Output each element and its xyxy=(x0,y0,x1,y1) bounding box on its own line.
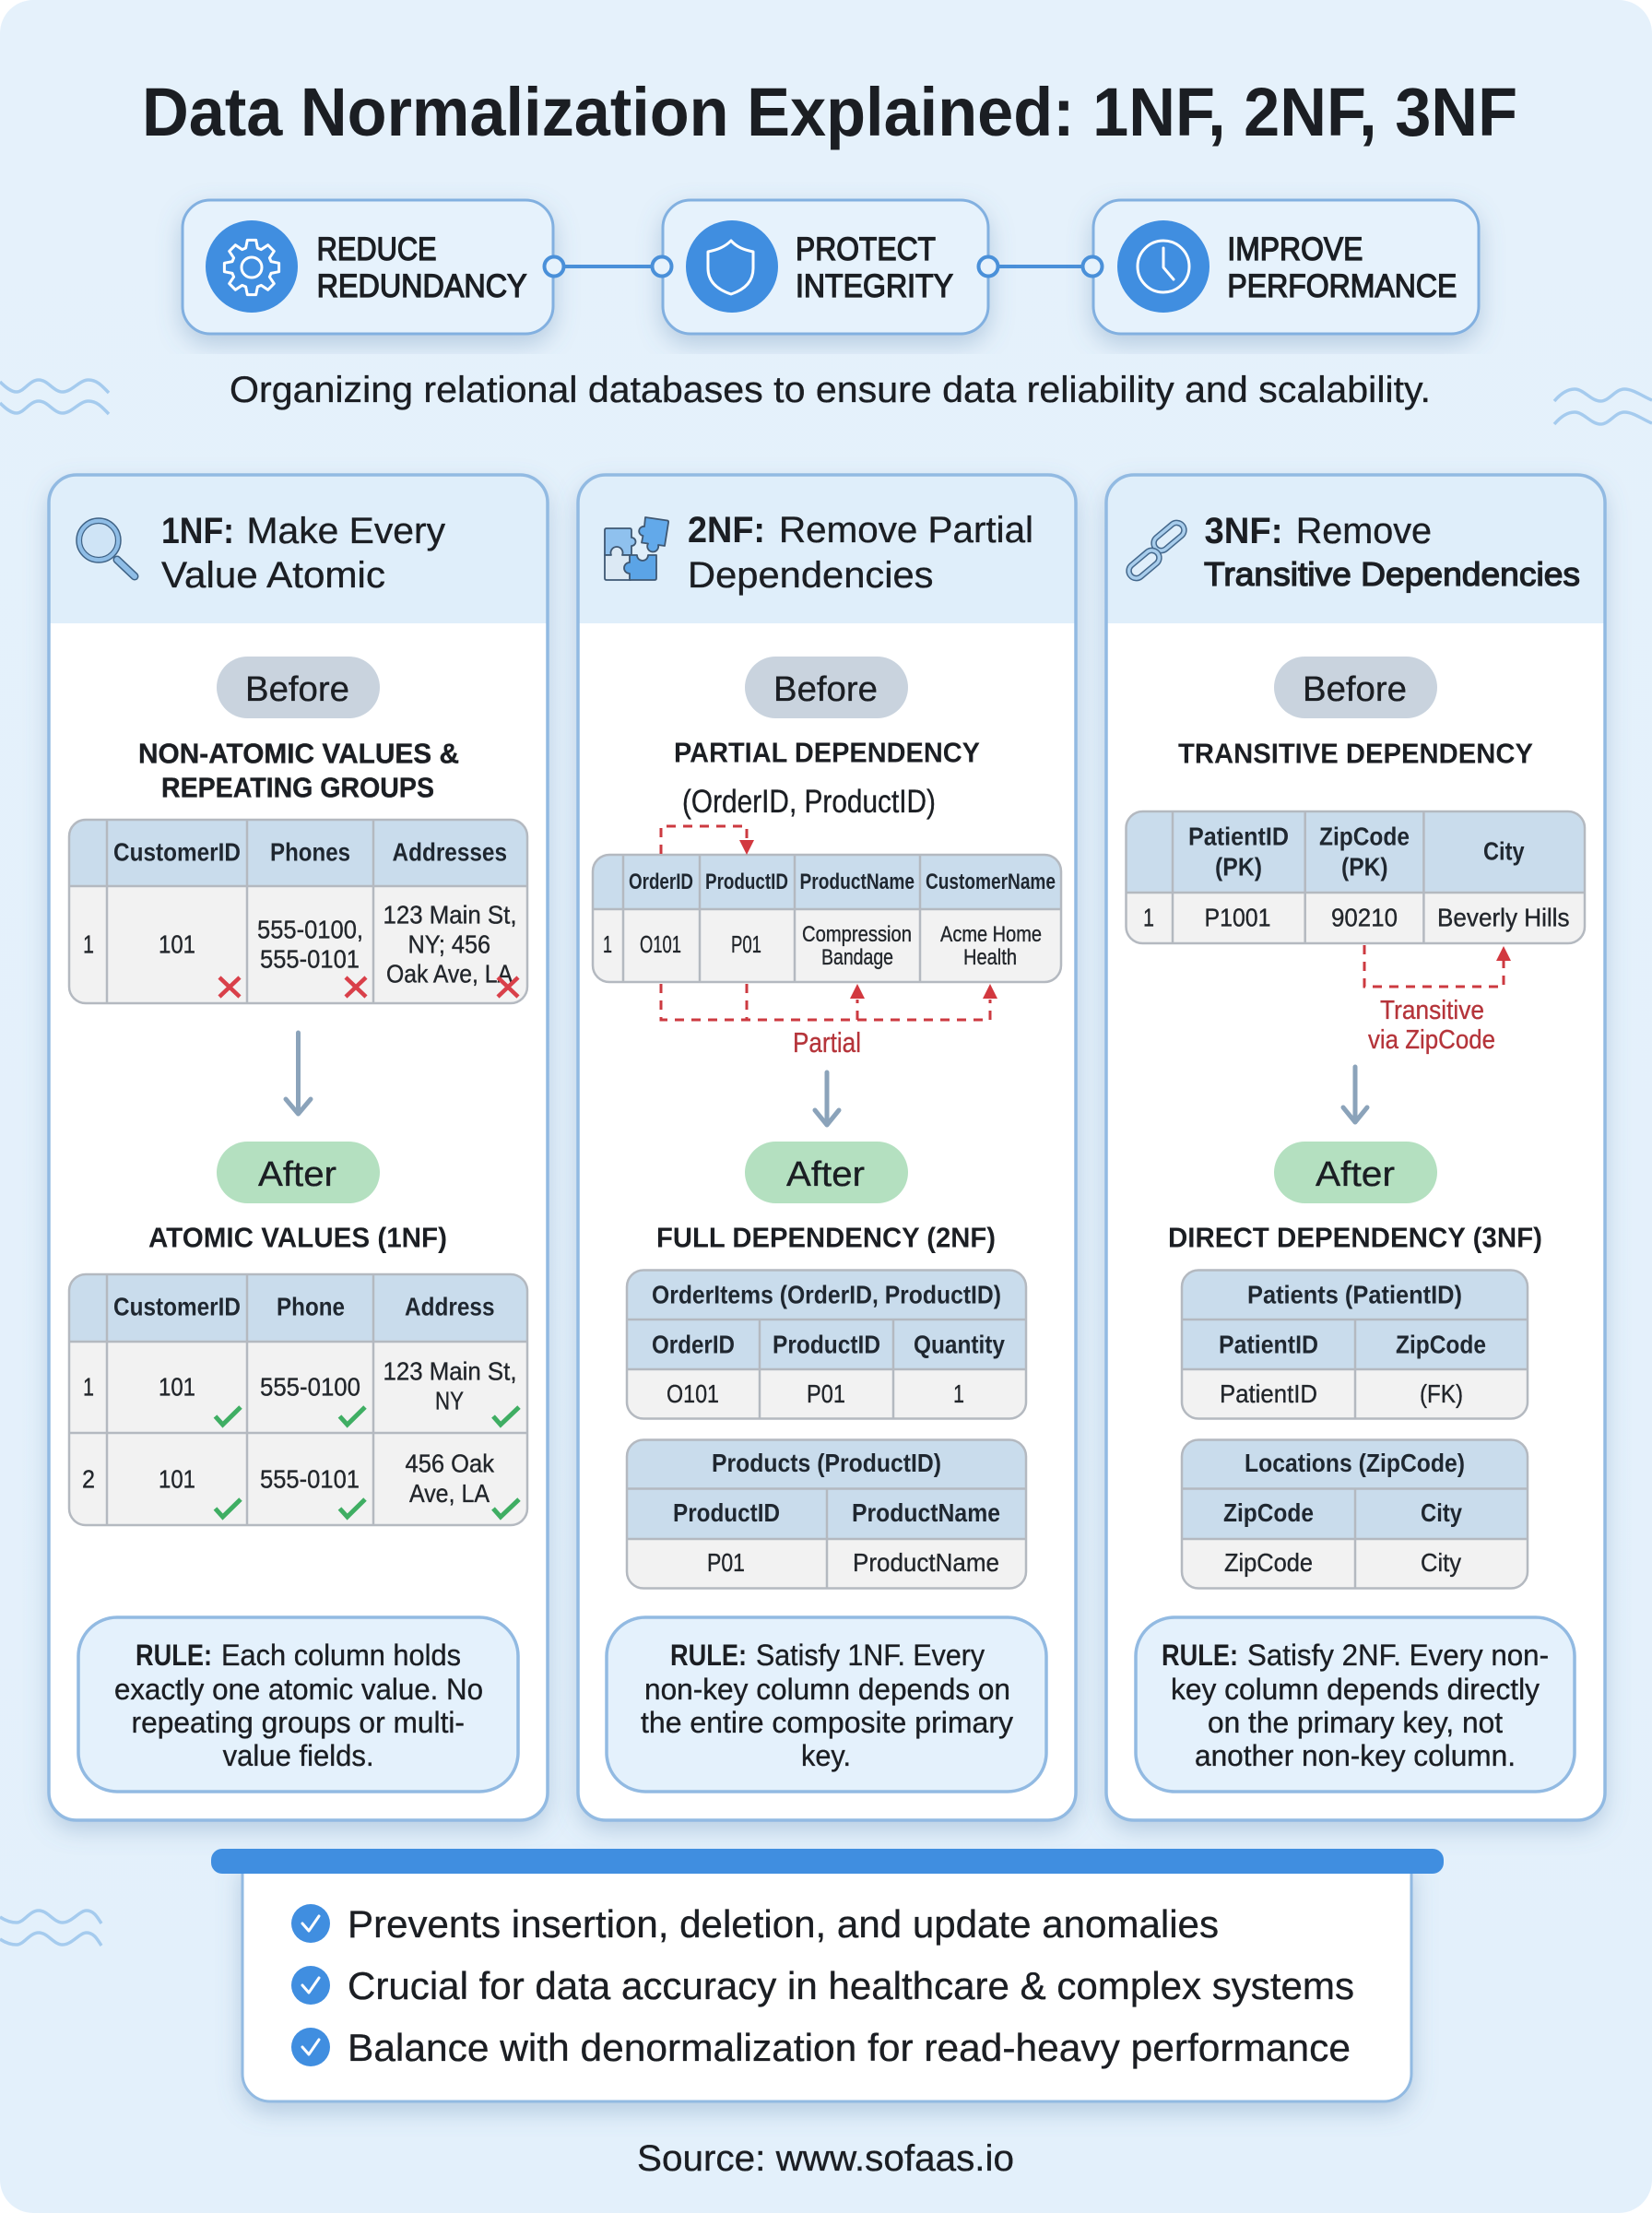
before table: Addresses xyxy=(393,837,507,867)
transitive label: via ZipCode xyxy=(1368,1025,1495,1055)
before table: 555-0100, xyxy=(257,915,363,944)
chip label: REDUNDANCY xyxy=(317,268,527,304)
chip: reduce redundancy xyxy=(183,200,553,334)
rule box: value fields. xyxy=(223,1739,374,1772)
panel heading: 1NF: xyxy=(161,511,234,551)
after pill xyxy=(217,1142,380,1203)
table: Products xyxy=(627,1440,1026,1588)
composite key label: (OrderID, ProductID) xyxy=(682,784,936,820)
table: Locations: Locations (ZipCode) xyxy=(1245,1449,1465,1477)
panel heading xyxy=(1204,511,1580,593)
panel heading: 3NF: xyxy=(1204,511,1283,551)
summary top bar xyxy=(211,1849,1444,1874)
connector lines between benefit chips xyxy=(553,265,1092,268)
bullet 2: Crucial for data accuracy in healthcare & complex systems xyxy=(348,1964,1354,2007)
chip label: REDUCE xyxy=(317,231,437,267)
panel header xyxy=(1106,475,1605,623)
after pill: After xyxy=(1316,1155,1395,1194)
icon: magnifier xyxy=(77,518,135,576)
rule box: RULE: xyxy=(1162,1639,1238,1672)
panel heading: 2NF: xyxy=(688,510,765,550)
after pill xyxy=(1274,1142,1437,1203)
before heading: PARTIAL DEPENDENCY xyxy=(674,736,980,769)
table: OrderItems: O101 xyxy=(667,1379,719,1408)
before pill: Before xyxy=(773,670,878,709)
chip: improve performance xyxy=(1093,200,1479,334)
after pill: After xyxy=(786,1155,865,1194)
table: Products: ProductID xyxy=(673,1498,780,1527)
rule box xyxy=(607,1617,1046,1792)
rule box: key column depends directly xyxy=(1171,1673,1540,1706)
before table: Phones xyxy=(270,837,350,867)
before table: (PK) xyxy=(1215,852,1262,882)
rule box: RULE: xyxy=(670,1639,747,1672)
transitive label: Transitive xyxy=(1380,996,1484,1025)
chip label: PERFORMANCE xyxy=(1227,268,1457,304)
transitive label xyxy=(1368,996,1495,1055)
icon: gear xyxy=(206,220,298,313)
panel heading: Remove Partial xyxy=(779,510,1033,550)
table: OrderItems: P01 xyxy=(807,1379,845,1408)
before table: 555-0101 xyxy=(260,944,360,974)
table: OrderItems: 1 xyxy=(953,1379,964,1408)
table: OrderItems: Quantity xyxy=(914,1330,1005,1359)
panel heading xyxy=(688,510,1033,596)
after table xyxy=(69,1274,527,1525)
check marks xyxy=(216,1407,519,1517)
rule box: exactly one atomic value. No xyxy=(114,1673,483,1706)
after heading: ATOMIC VALUES (1NF) xyxy=(148,1221,447,1254)
chip label xyxy=(796,231,953,304)
panel heading: Value Atomic xyxy=(161,555,385,596)
table: Locations: ZipCode xyxy=(1224,1548,1313,1577)
before table: P1001 xyxy=(1204,904,1270,931)
before heading: NON-ATOMIC VALUES & xyxy=(138,738,459,769)
table: Products: ProductName xyxy=(853,1548,999,1577)
rule box: Each column holds xyxy=(221,1639,461,1672)
arrow down xyxy=(815,1072,839,1125)
wave decoration bottom left xyxy=(0,1911,101,1946)
before table: O101 xyxy=(640,930,681,958)
partial label: Partial xyxy=(793,1026,861,1059)
before pill xyxy=(745,657,908,718)
rule box: another non-key column. xyxy=(1195,1739,1516,1772)
table: Locations xyxy=(1182,1440,1528,1588)
before table: 1 xyxy=(1143,904,1154,931)
panel heading xyxy=(161,511,445,596)
before table: ZipCode xyxy=(1319,822,1410,850)
error marks xyxy=(219,977,518,997)
dependency arrows xyxy=(661,826,997,1020)
before table: ProductID xyxy=(705,870,788,894)
before table: Compression xyxy=(802,922,912,947)
before table: Acme Home xyxy=(940,922,1042,947)
chip label: PROTECT xyxy=(796,231,936,267)
panel: 3NF xyxy=(1106,475,1605,1820)
rule box: Satisfy 1NF. Every xyxy=(756,1639,985,1672)
before table: NY; 456 xyxy=(407,929,490,959)
subtitle: Organizing relational databases to ensure data reliability and scalability. xyxy=(230,370,1431,410)
rule box: Satisfy 2NF. Every non- xyxy=(1247,1639,1549,1672)
before table: Bandage xyxy=(821,945,893,970)
table: OrderItems: OrderItems (OrderID, ProductID) xyxy=(652,1280,1001,1309)
table: OrderItems: OrderID xyxy=(652,1330,735,1359)
before table: 1 xyxy=(603,930,612,958)
before pill: Before xyxy=(245,670,349,709)
table: Patients: Patients (PatientID) xyxy=(1247,1280,1462,1309)
bullet 1: Prevents insertion, deletion, and update anomalies xyxy=(348,1902,1219,1946)
chip: protect integrity xyxy=(663,200,988,334)
after table: Ave, LA xyxy=(409,1479,490,1508)
panel heading: Dependencies xyxy=(688,555,933,596)
before table: Beverly Hills xyxy=(1437,904,1569,931)
before table: ProductName xyxy=(800,870,914,894)
table: Patients: PatientID xyxy=(1219,1330,1318,1359)
table: OrderItems xyxy=(627,1271,1026,1418)
before heading xyxy=(138,738,459,804)
rule box: the entire composite primary xyxy=(641,1706,1013,1739)
before table: Oak Ave, LA xyxy=(386,959,513,988)
before table: OrderID xyxy=(629,870,693,894)
table: Patients: PatientID xyxy=(1220,1379,1317,1408)
table: Patients: (FK) xyxy=(1420,1379,1463,1408)
before table: CustomerName xyxy=(926,870,1056,894)
after table: 555-0100 xyxy=(260,1372,360,1402)
arrow down xyxy=(286,1033,311,1114)
summary box xyxy=(211,1849,1444,2101)
after table: CustomerID xyxy=(113,1293,241,1320)
rule box xyxy=(1136,1617,1575,1792)
table: Products: P01 xyxy=(707,1548,745,1577)
table: Locations: City xyxy=(1421,1548,1461,1577)
title: Data Normalization Explained: 1NF, 2NF, 3NF xyxy=(142,74,1517,150)
panel header xyxy=(49,475,548,623)
chip label xyxy=(317,231,527,304)
panel: 1NF xyxy=(49,475,548,1820)
table: Patients xyxy=(1182,1271,1528,1418)
before table: 123 Main St, xyxy=(384,900,516,929)
after table: NY xyxy=(435,1387,464,1414)
before heading: REPEATING GROUPS xyxy=(161,771,434,804)
before heading: TRANSITIVE DEPENDENCY xyxy=(1178,738,1533,769)
after table: 2 xyxy=(82,1464,95,1494)
before table: City xyxy=(1483,837,1525,865)
bullet 3: Balance with denormalization for read-heavy performance xyxy=(348,2026,1351,2069)
wave decoration top right xyxy=(1554,389,1652,424)
after pill xyxy=(745,1142,908,1203)
panel heading: Transitive Dependencies xyxy=(1204,555,1580,593)
before table xyxy=(1127,811,1585,943)
after table: 456 Oak xyxy=(406,1450,495,1477)
arrow down xyxy=(1343,1067,1367,1122)
rule box: non-key column depends on xyxy=(644,1673,1010,1706)
before table: PatientID xyxy=(1188,822,1289,850)
rule box: key. xyxy=(801,1739,851,1772)
chip label: IMPROVE xyxy=(1227,231,1363,267)
table: OrderItems: ProductID xyxy=(773,1330,880,1359)
rule box: repeating groups or multi- xyxy=(131,1706,465,1739)
wave decoration top left xyxy=(0,380,109,414)
before table: 90210 xyxy=(1331,904,1398,931)
chip label xyxy=(1227,231,1457,304)
rule box: RULE: xyxy=(136,1639,212,1672)
after table: 555-0101 xyxy=(260,1464,360,1494)
panel heading: Make Every xyxy=(247,511,445,551)
after heading: DIRECT DEPENDENCY (3NF) xyxy=(1168,1221,1542,1254)
before pill: Before xyxy=(1303,670,1407,709)
after table: 101 xyxy=(159,1372,195,1402)
rule box: on the primary key, not xyxy=(1208,1706,1503,1739)
chip label: INTEGRITY xyxy=(796,268,953,304)
table: Locations: City xyxy=(1421,1498,1462,1527)
rule box xyxy=(78,1617,518,1792)
before table: Health xyxy=(963,945,1017,970)
connector nodes xyxy=(544,256,1103,277)
before table xyxy=(593,855,1061,982)
after heading: FULL DEPENDENCY (2NF) xyxy=(656,1221,996,1254)
panel header xyxy=(578,475,1076,623)
after table: 101 xyxy=(159,1464,195,1494)
icon: chain xyxy=(1126,520,1187,581)
dependency arrow xyxy=(1364,945,1511,987)
source: Source: www.sofaas.io xyxy=(637,2138,1014,2179)
after table: 123 Main St, xyxy=(384,1357,516,1385)
before table xyxy=(69,820,527,1003)
after pill: After xyxy=(258,1155,336,1194)
panel heading: Remove xyxy=(1296,511,1432,551)
table: Patients: ZipCode xyxy=(1396,1330,1486,1359)
before table: CustomerID xyxy=(113,837,241,867)
before table: 101 xyxy=(159,929,195,959)
before pill xyxy=(1274,657,1437,718)
panel: 2NF xyxy=(578,475,1076,1820)
table: Products: ProductName xyxy=(852,1498,1000,1527)
after table: Address xyxy=(405,1293,494,1320)
icon: clock xyxy=(1117,220,1210,313)
table: Products: Products (ProductID) xyxy=(712,1449,941,1477)
before pill xyxy=(217,657,380,718)
icon: puzzle xyxy=(605,517,668,580)
icon: shield xyxy=(686,220,778,313)
before table: (PK) xyxy=(1341,852,1388,882)
before table: P01 xyxy=(731,930,761,958)
after table: Phone xyxy=(277,1293,345,1320)
table: Locations: ZipCode xyxy=(1223,1498,1314,1527)
before table: 1 xyxy=(83,929,94,959)
after table: 1 xyxy=(83,1372,94,1402)
